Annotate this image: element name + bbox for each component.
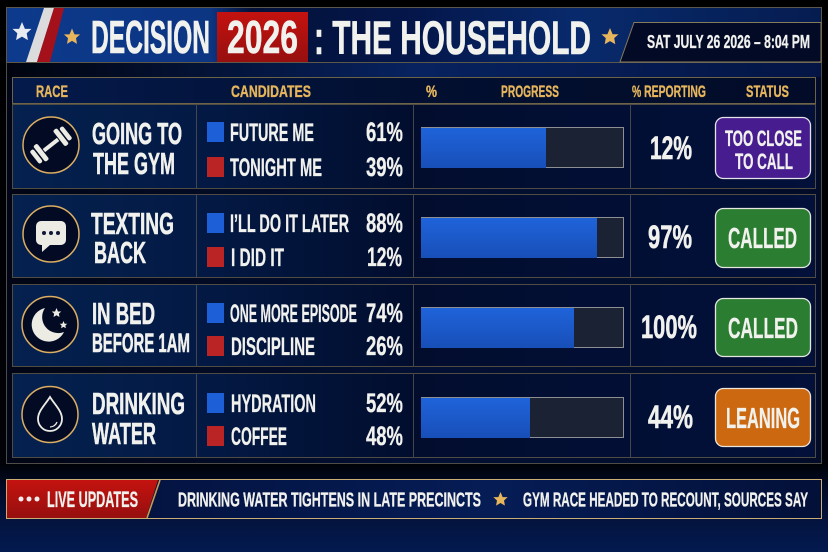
title word: decision: DECISION	[91, 11, 210, 63]
title subject: : THE HOUSEHOLD	[314, 11, 591, 64]
race name: WATER	[92, 416, 156, 451]
icon: water drop	[22, 386, 78, 442]
candidates	[207, 117, 403, 182]
candidates: 88%	[366, 208, 403, 238]
candidates: ONE MORE EPISODE	[230, 300, 357, 328]
candidates: DISCIPLINE	[231, 333, 315, 361]
row: going to the gym	[12, 104, 816, 189]
icon: gold star right	[601, 28, 619, 44]
candidates: HYDRATION	[231, 390, 316, 418]
race name: GOING TO	[92, 116, 182, 151]
live updates label: LIVE UPDATES	[47, 487, 138, 512]
header banner	[6, 8, 822, 64]
candidates: TONIGHT ME	[230, 154, 322, 182]
candidates: FUTURE ME	[230, 119, 314, 147]
column label: status: STATUS	[746, 83, 789, 101]
race name	[92, 386, 185, 451]
status badge: too close to call: TO CALL	[735, 149, 793, 174]
candidates	[207, 208, 403, 272]
candidates: 61%	[366, 117, 403, 147]
main panel frame	[6, 62, 822, 464]
race name: IN BED	[92, 296, 155, 331]
percent reporting: 97%	[648, 219, 692, 255]
status badge: leaning	[716, 388, 810, 446]
candidates: 48%	[366, 421, 403, 451]
icon: dumbbell	[23, 117, 79, 173]
flag stripes	[26, 8, 64, 62]
race name: TEXTING	[91, 206, 174, 241]
race name	[91, 206, 174, 270]
icon: speech bubble	[23, 206, 79, 262]
column label: percent reporting: % REPORTING	[632, 83, 706, 101]
percent reporting: 12%	[650, 130, 692, 166]
status badge: too close to call	[716, 118, 810, 178]
candidates: 52%	[366, 388, 403, 418]
progress bar	[421, 128, 624, 168]
race name: DRINKING	[92, 386, 185, 421]
race name: BEFORE 1AM	[92, 328, 190, 358]
table header row	[12, 78, 816, 104]
candidates: I DID IT	[231, 244, 284, 272]
row: drinking water	[12, 373, 816, 458]
row: texting back	[12, 194, 816, 278]
candidates: COFFEE	[231, 423, 287, 451]
candidates: 39%	[366, 152, 403, 182]
status badge: called	[716, 208, 810, 268]
race name: BACK	[94, 235, 146, 270]
row: in bed before 1am	[12, 284, 816, 367]
date panel	[620, 22, 821, 62]
column label: candidates: CANDIDATES	[231, 83, 311, 101]
status badge: called	[716, 298, 810, 356]
percent reporting: 44%	[648, 399, 693, 435]
icon: moon and stars	[22, 296, 78, 352]
progress bar	[421, 398, 624, 438]
live updates label	[7, 480, 160, 518]
headline one: DRINKING WATER TIGHTENS IN LATE PRECINCTS	[178, 490, 481, 512]
progress bar	[421, 308, 624, 348]
race name: THE GYM	[93, 146, 175, 181]
candidates: 12%	[367, 242, 402, 272]
percent reporting: 100%	[641, 309, 697, 345]
candidates: 26%	[366, 331, 403, 361]
candidates	[207, 298, 403, 361]
column label: race: RACE	[36, 83, 68, 101]
icon: gold star	[64, 28, 80, 44]
icon: white star	[12, 22, 32, 40]
race name	[92, 296, 190, 358]
news ticker	[6, 480, 822, 518]
race name	[92, 116, 182, 181]
icon: separator star	[493, 492, 508, 506]
candidates: I’LL DO IT LATER	[230, 210, 349, 238]
column label: progress: PROGRESS	[501, 83, 559, 101]
candidates: 74%	[366, 298, 403, 328]
progress bar	[421, 218, 624, 258]
title year: 2026: 2026	[227, 11, 298, 63]
column label: percent: %	[426, 83, 437, 101]
candidates	[207, 388, 403, 451]
